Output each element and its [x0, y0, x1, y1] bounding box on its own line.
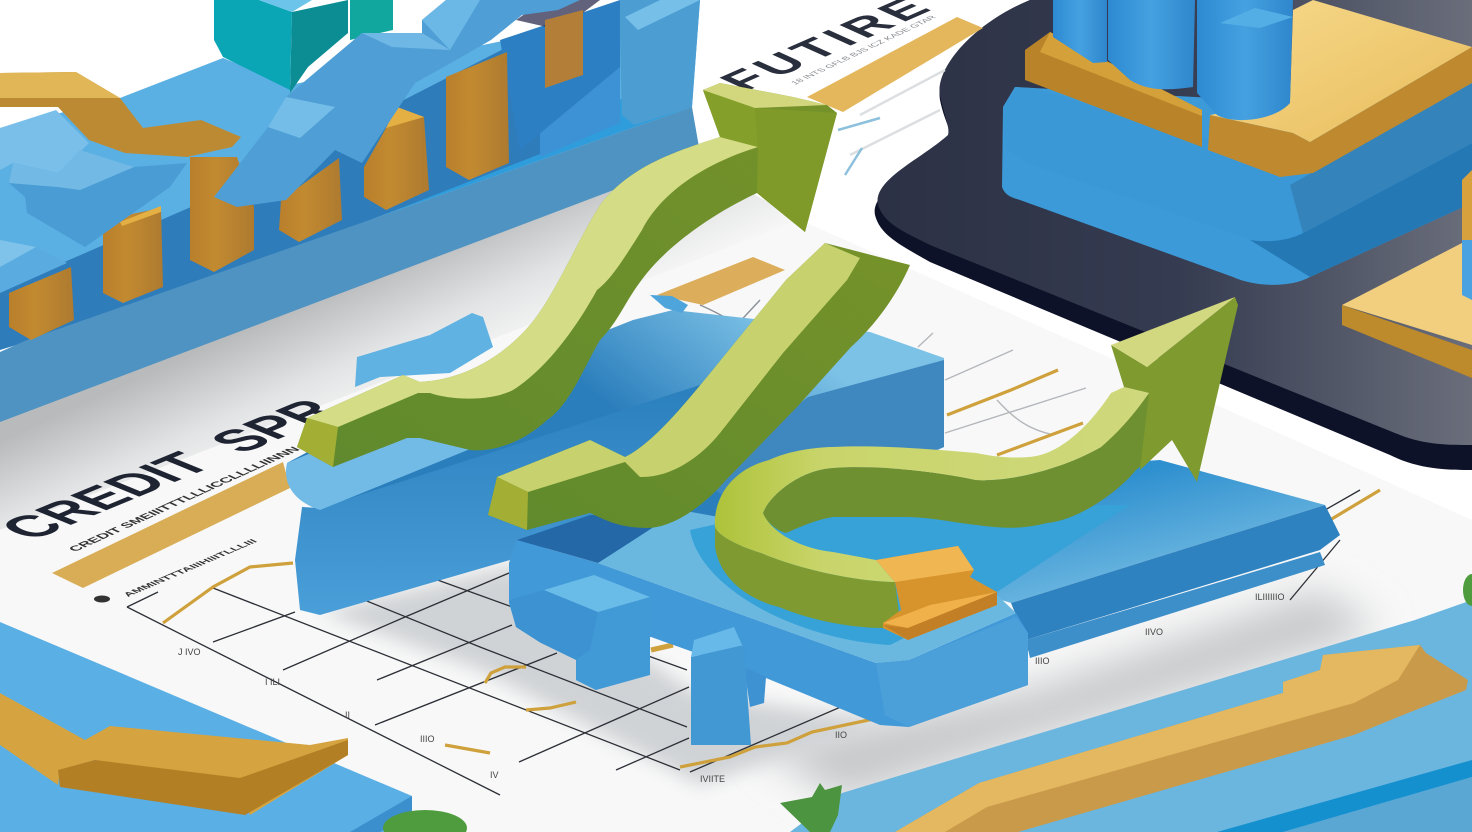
- icon: gold clasp: [876, 546, 997, 640]
- gold ribbon: [0, 72, 241, 157]
- panel: central blue platform upper: [286, 295, 944, 615]
- axis labels: IIIO: [420, 734, 435, 744]
- line chart grid: [127, 490, 1360, 795]
- panel: stacked blue and gold platform: [1002, 0, 1472, 285]
- axis labels: IIO: [835, 730, 847, 740]
- teal blocks: [214, 0, 393, 93]
- gold bars: [9, 10, 583, 340]
- axis labels: IVIITE: [700, 774, 725, 784]
- icon: small blue cube: [509, 575, 650, 690]
- mini chart strokes: [838, 70, 945, 175]
- icon: small blue pillar: [691, 627, 766, 745]
- panel: top-left bar chart platform: [0, 0, 700, 422]
- arrow: gold left: [0, 693, 348, 815]
- panel: bottom-left blue tile with gold arrow: [0, 622, 412, 832]
- blue ribbon line: right: [214, 0, 580, 207]
- gray chart lines: [700, 300, 1086, 435]
- gold trend lines: [163, 370, 1380, 767]
- bullet dot: [94, 596, 110, 602]
- panel: central blue platform lower: [509, 460, 1340, 727]
- gold tag near middle arrow: [657, 257, 785, 305]
- blue cylinders: [1053, 0, 1293, 120]
- axis labels: [178, 592, 1285, 784]
- axis labels: IIVO: [1145, 627, 1163, 637]
- axis labels: I ILI: [265, 677, 280, 687]
- gold tier: [1025, 0, 1472, 177]
- panel: dark cloud platform: [875, 0, 1472, 470]
- caption: AMMINTTTAIIIHIIITLLLIII: [120, 538, 260, 598]
- axis labels: J IVO: [178, 647, 201, 657]
- subtitle: future: 18 INTS GFLB BJS ICZ KADE GTAR: [789, 14, 939, 86]
- panel: right gold block: [1342, 170, 1472, 378]
- axis labels: IIIO: [1035, 656, 1050, 666]
- icon: green leaves: [383, 574, 1472, 832]
- panel: bottom-right blue tile with gold arrow: [790, 600, 1472, 832]
- subtitle: credit: CREDIT SMEIIITTTLLLICCLLLLIINNN: [65, 445, 303, 553]
- arrow: gold right: [895, 645, 1468, 832]
- axis labels: IV: [490, 770, 499, 780]
- blue ribbon line: left: [0, 110, 187, 293]
- gold bar: future banner: [807, 17, 983, 112]
- arrow: upper green arrow: [297, 83, 837, 467]
- axis labels: II: [345, 710, 350, 720]
- arrow: lower curved green arrow: [715, 297, 1238, 628]
- blue rear blocks: [500, 0, 700, 157]
- axis labels: ILIIIIIIO: [1255, 592, 1285, 602]
- gold bar: credit banner: [52, 462, 290, 588]
- arrow: middle green arrow: [488, 243, 910, 530]
